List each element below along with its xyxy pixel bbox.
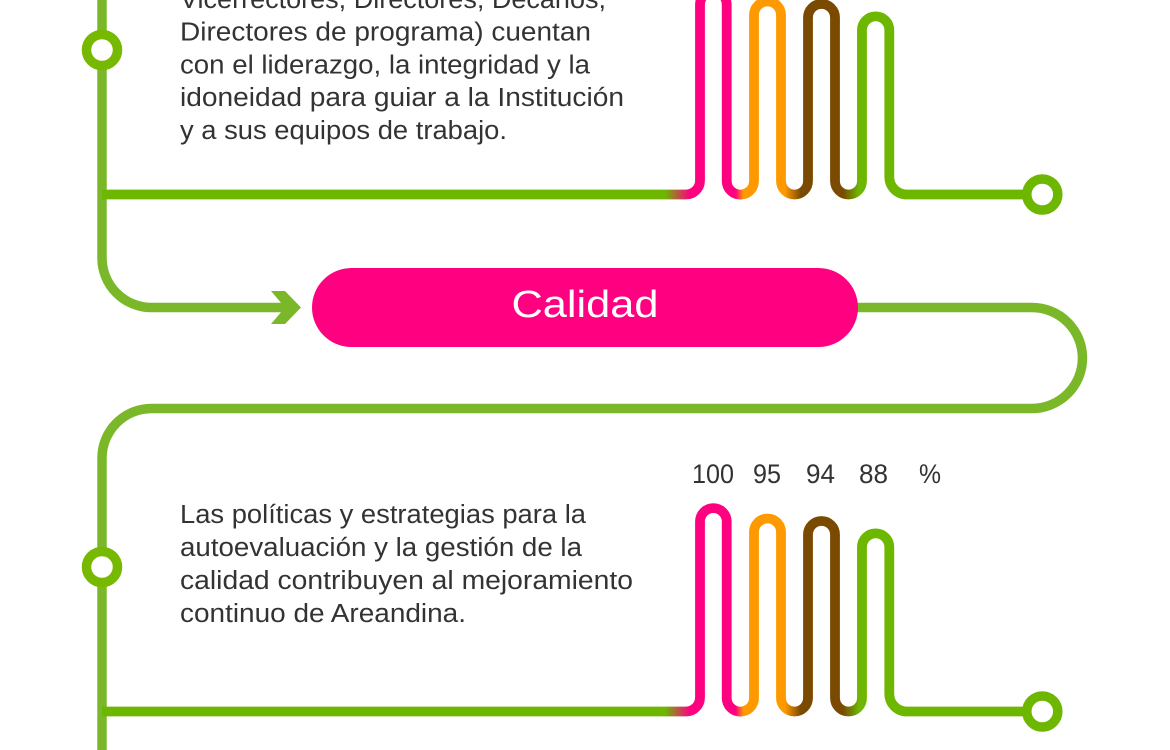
chart values: % bbox=[919, 459, 941, 489]
upper text block: Directores de programa) cuentan bbox=[180, 18, 591, 46]
upper text block: y a sus equipos de trabajo. bbox=[180, 117, 507, 145]
chart values bbox=[692, 459, 941, 489]
upper text block bbox=[180, 0, 624, 145]
upper text block: idoneidad para guiar a la Institución bbox=[180, 84, 624, 112]
lower chart: meander line with four values bbox=[102, 508, 1030, 712]
lower marker: timeline node bbox=[86, 552, 118, 582]
chart values: 95 bbox=[753, 459, 781, 489]
upper text block: con el liderazgo, la integridad y la bbox=[180, 51, 591, 79]
chart values: 100 bbox=[692, 459, 734, 489]
lower text block: autoevaluación y la gestión de la bbox=[180, 534, 583, 562]
chart values: 88 bbox=[859, 459, 888, 489]
lower text block bbox=[180, 501, 633, 628]
heading pill: Calidad bbox=[312, 268, 858, 347]
upper end node bbox=[1027, 179, 1058, 210]
lower text block: calidad contribuyen al mejoramiento bbox=[180, 567, 633, 595]
upper chart: meander line with four values bbox=[102, 0, 1030, 195]
upper marker: timeline node bbox=[86, 34, 118, 66]
lower text block: Las políticas y estrategias para la bbox=[180, 501, 587, 529]
lower end node bbox=[1027, 696, 1058, 727]
lower text block: continuo de Areandina. bbox=[180, 600, 466, 628]
heading pill: Calidad: Calidad bbox=[512, 284, 658, 326]
chart values: 94 bbox=[806, 459, 835, 489]
connector: upper vertical line with arrow path to Calidad bbox=[102, 0, 301, 324]
connector: loop from Calidad to lower section bbox=[102, 308, 1082, 750]
icon: arrow head bbox=[271, 291, 301, 324]
